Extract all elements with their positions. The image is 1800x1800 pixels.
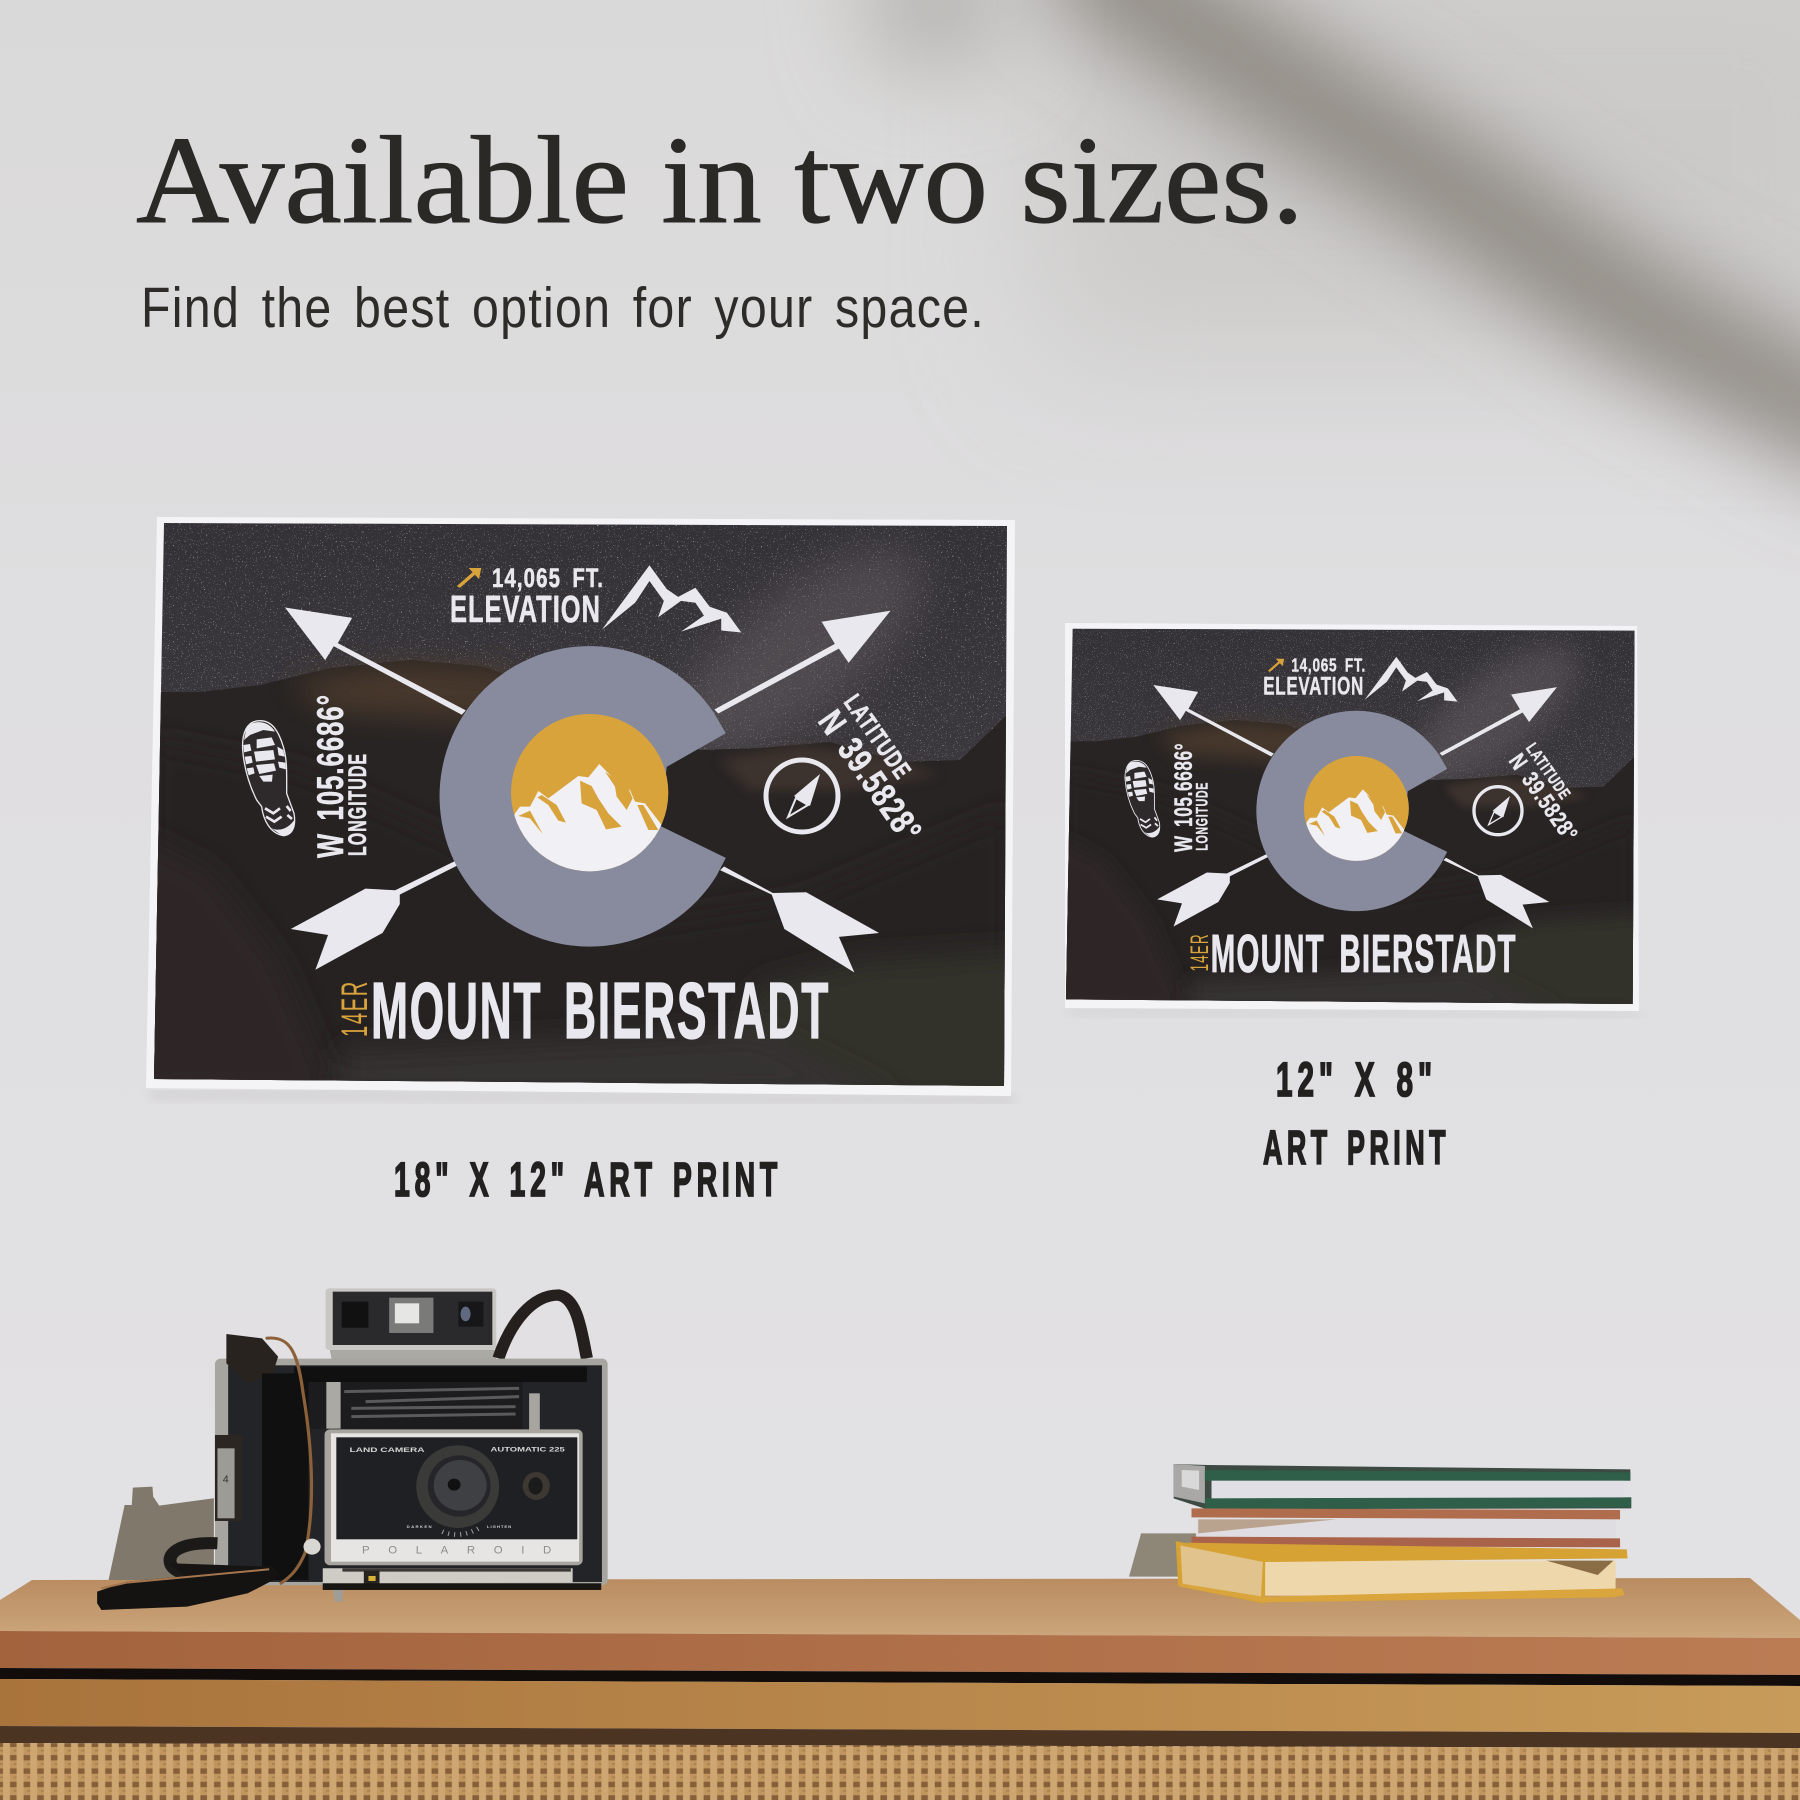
small icon: boot print	[1125, 760, 1160, 837]
panel text: darken: DARKEN	[407, 1524, 432, 1529]
yellow book	[1178, 1543, 1628, 1602]
small arrow: north east	[1440, 687, 1557, 756]
icon: mountain outline	[602, 565, 741, 632]
small text: elevation label: ELEVATION	[1263, 673, 1364, 701]
small print artwork	[1050, 620, 1650, 1013]
small icon: gold up arrow	[1269, 659, 1284, 671]
leaf shadow on wall	[860, 0, 1800, 430]
right strap	[498, 1295, 587, 1358]
panel text: land camera: LAND CAMERA	[350, 1447, 425, 1454]
icon: gold up arrow	[458, 568, 481, 587]
text: longitude value: W 105.6686°	[310, 694, 351, 858]
front panel	[325, 1429, 583, 1565]
gap under top	[0, 1668, 1800, 1686]
camera shadow on wall	[109, 1487, 214, 1580]
icon: boot print	[243, 721, 295, 836]
text: elevation value: 14,065 FT.	[492, 563, 604, 593]
small icon: compass	[1474, 787, 1522, 835]
table front edge	[0, 1631, 1800, 1675]
arrow: south west	[291, 861, 458, 970]
small print background	[1050, 620, 1650, 1013]
print paper border	[146, 517, 1015, 1096]
emblem: grey C	[440, 646, 726, 947]
lower wood rail	[0, 1679, 1800, 1733]
object: stack of books	[1129, 1464, 1631, 1602]
label: small print size line two: ART PRINT	[1263, 1122, 1450, 1175]
rattan panel	[0, 1743, 1800, 1800]
subtitle: Find the best option for your space.	[141, 276, 985, 340]
leather strap loop	[97, 1543, 280, 1610]
small icon: mountain outline	[1365, 657, 1458, 702]
lens	[416, 1445, 499, 1535]
small arrow: south west	[1157, 854, 1269, 927]
shadow: large print	[150, 1092, 1014, 1102]
emblem: sun and peak disc	[511, 714, 668, 872]
shadow under rail	[0, 1726, 1800, 1748]
object: instant camera	[97, 1288, 608, 1610]
small arrow: north west	[1153, 685, 1274, 756]
brown book	[1192, 1508, 1620, 1547]
arrows and C emblem	[285, 565, 891, 973]
small text: longitude value: W 105.6686°	[1171, 743, 1198, 852]
small text: latitude value: N 39.5828°	[1504, 749, 1583, 847]
small arrow: south east	[1443, 858, 1549, 928]
small text: elevation value: 14,065 FT.	[1291, 655, 1366, 675]
arrow: north west	[285, 608, 466, 715]
text: latitude value: N 39.5828°	[810, 703, 930, 850]
panel text: polaroid: POLAROID	[362, 1545, 551, 1556]
viewfinder housing	[326, 1288, 498, 1359]
small text: latitude label: LATITUDE	[1522, 739, 1575, 803]
label: large print size: 18" X 12" ART PRINT	[394, 1154, 782, 1207]
table top surface	[0, 1578, 1800, 1638]
icon: compass	[766, 760, 838, 832]
table: sideboard	[0, 1578, 1800, 1800]
small text: 14er tag: 14ER	[1187, 933, 1214, 971]
text: elevation label: ELEVATION	[450, 589, 601, 631]
left strap	[226, 1334, 321, 1584]
camera body: 4	[223, 1475, 229, 1486]
light sensor	[523, 1472, 550, 1500]
small print paper border	[1065, 623, 1639, 1011]
small emblem: sun and peak disc	[1304, 756, 1409, 861]
panel text: lighten: LIGHTEN	[487, 1524, 511, 1529]
print artwork background	[130, 510, 1030, 1100]
bottom tray	[323, 1568, 601, 1602]
small print arrows and C emblem	[1153, 657, 1557, 928]
books shadow on wall	[1129, 1533, 1196, 1577]
camera body	[215, 1359, 608, 1585]
text: longitude label: LONGITUDE	[344, 753, 372, 856]
text: peak name: MOUNT BIERSTADT	[371, 966, 830, 1055]
green book	[1174, 1464, 1631, 1509]
shadow: small print	[1068, 1010, 1640, 1017]
arrow: south east	[720, 867, 879, 973]
arrow: north east	[714, 611, 891, 714]
panel: large art print	[130, 510, 1030, 1100]
panel: small art print	[1050, 620, 1650, 1013]
label: small print size line one: 12" X 8"	[1276, 1054, 1437, 1107]
title: Available in two sizes.	[136, 112, 1304, 250]
text: latitude label: LATITUDE	[838, 689, 917, 785]
panel text: automatic 225: AUTOMATIC 225	[491, 1447, 565, 1454]
small emblem: grey C	[1256, 711, 1447, 911]
small text: longitude label: LONGITUDE	[1192, 782, 1211, 851]
small text: peak name: MOUNT BIERSTADT	[1211, 925, 1517, 984]
text: 14er tag: 14ER	[334, 980, 375, 1037]
